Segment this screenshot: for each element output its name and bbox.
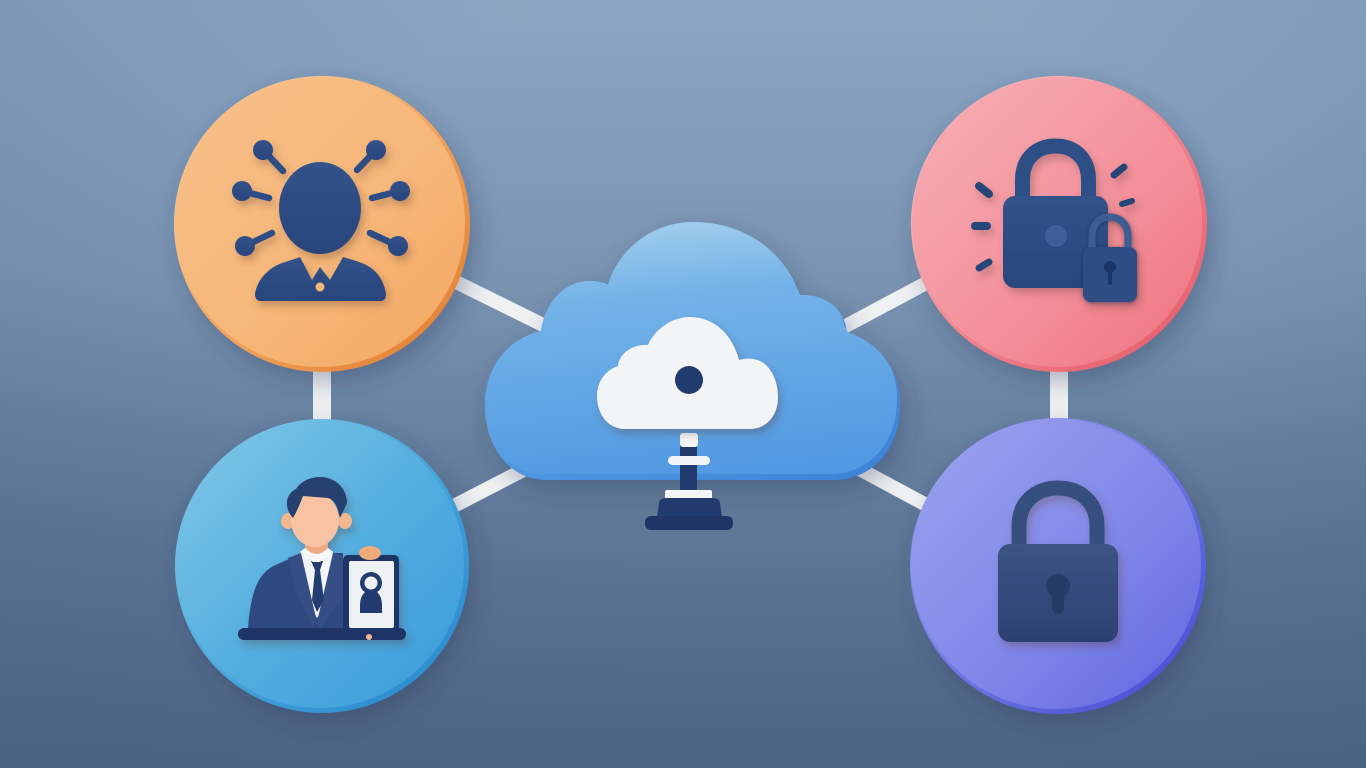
icon: white inner cloud <box>597 317 778 429</box>
panel: central cloud <box>482 216 900 530</box>
icon: cloud node dot <box>675 366 703 394</box>
icon: network stand <box>645 433 733 530</box>
panel: red circle, padlocks <box>911 76 1207 372</box>
icon: padlock <box>998 488 1118 642</box>
connector lines <box>322 280 1059 508</box>
icon: person with radiating nodes <box>232 140 410 301</box>
panel: orange circle, person with connection nodes <box>174 76 470 372</box>
cloud body <box>485 222 900 480</box>
panel: blue circle, businessman with ID badge <box>175 419 469 713</box>
icon: large and small padlock with alert ticks <box>975 146 1137 302</box>
icon: businessman holding keyhole badge <box>238 477 406 640</box>
panel: purple circle, padlock <box>910 418 1206 714</box>
